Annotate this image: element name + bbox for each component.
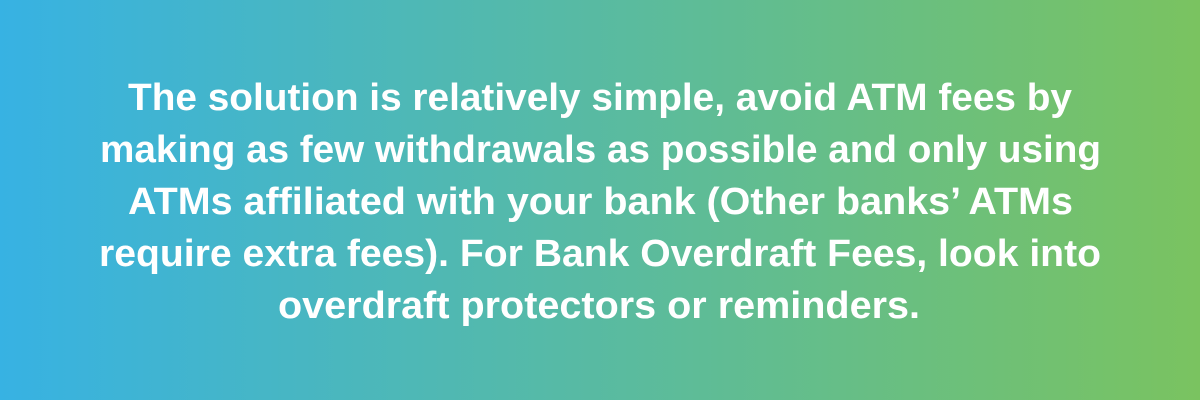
main text block	[99, 77, 1101, 327]
main text block: making as few withdrawals as possible and only using	[100, 129, 1101, 171]
main text block: overdraft protectors or reminders.	[278, 285, 920, 327]
main text block: The solution is relatively simple, avoid ATM fees by	[128, 77, 1072, 119]
main text block: ATMs affiliated with your bank (Other banks’ ATMs	[128, 181, 1073, 223]
main text block: require extra fees). For Bank Overdraft Fees, look into	[99, 233, 1101, 275]
